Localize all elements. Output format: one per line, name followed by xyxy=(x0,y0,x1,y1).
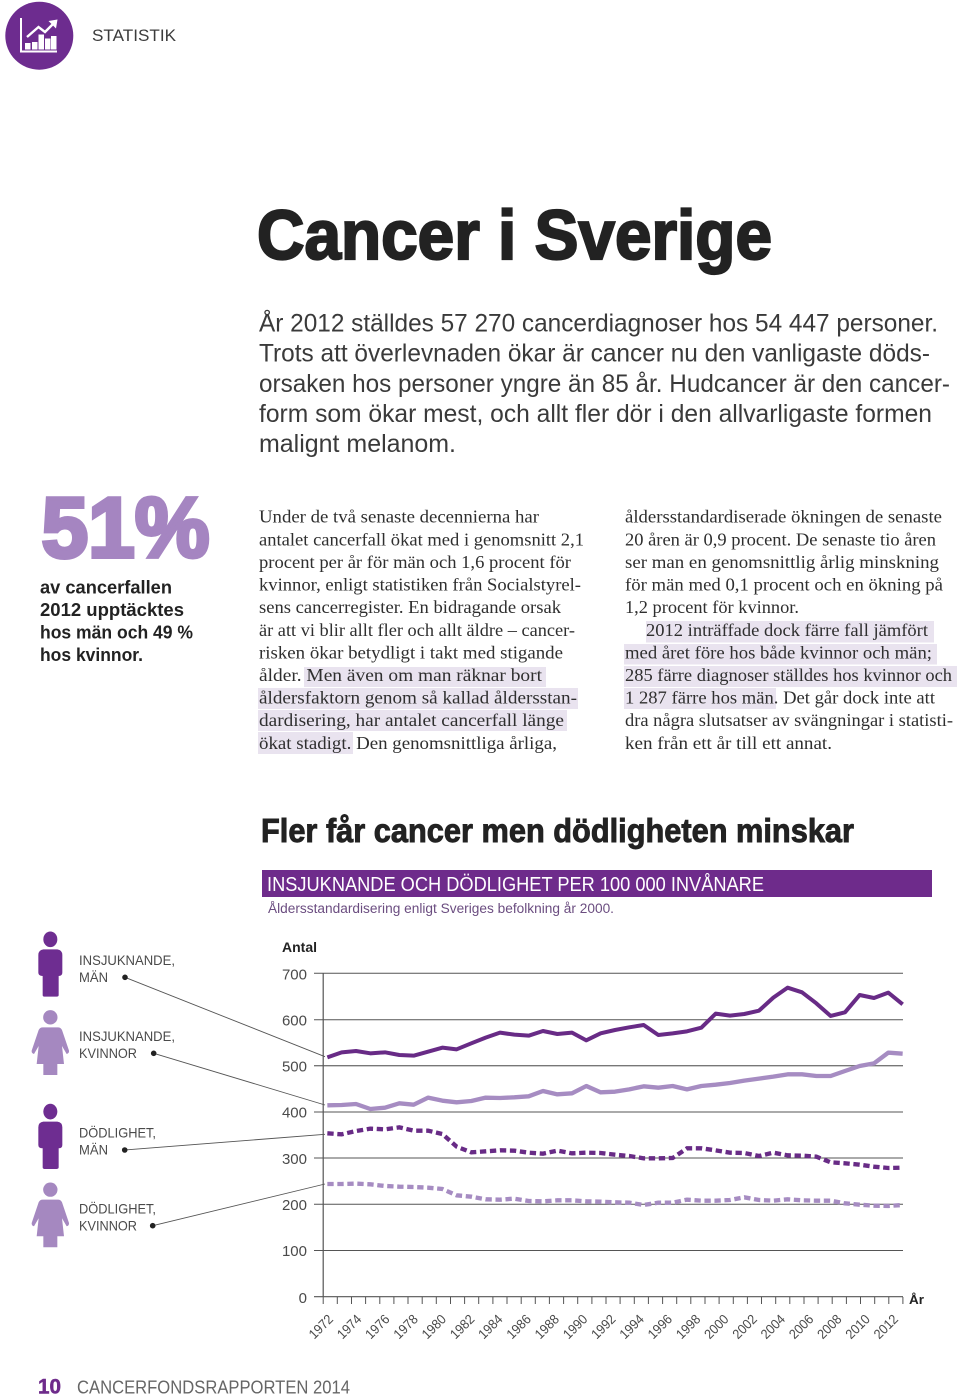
legend labels: INSJUKNANDE, xyxy=(79,952,175,968)
body text: right column: ken från ett år till ett annat. xyxy=(625,733,832,753)
body text: left column: procent per år för män och 1,6 procent för xyxy=(259,552,571,572)
x axis year labels: 1974 xyxy=(334,1311,365,1342)
legend labels: KVINNOR xyxy=(79,1218,137,1234)
body text: left column: ökat stadigt. Den genomsnittliga årliga, xyxy=(259,733,557,753)
line: mortality women xyxy=(327,1184,903,1206)
y axis labels: 100 xyxy=(282,1243,307,1260)
x axis year labels: 2008 xyxy=(814,1312,845,1342)
chart heading: Fler får cancer men dödligheten minskar xyxy=(261,812,854,849)
y axis labels: 200 xyxy=(282,1197,307,1214)
x axis year labels: 1994 xyxy=(617,1311,647,1342)
y axis labels: 700 xyxy=(282,966,307,983)
y axis labels: 400 xyxy=(282,1105,307,1122)
x axis year labels: 1998 xyxy=(673,1312,703,1342)
line: mortality men xyxy=(327,1127,903,1168)
callout: 51 percent xyxy=(40,481,210,665)
intro text: form som ökar mest, och allt fler dör i den allvarligaste formen xyxy=(259,400,932,428)
body text: right column: 1,2 procent för kvinnor. xyxy=(625,597,799,617)
legend xyxy=(32,931,175,1247)
x axis year labels: 1988 xyxy=(532,1312,562,1342)
icon: man, incidence xyxy=(38,931,62,997)
body text: right column: 2012 inträffade dock färre fall jämfört xyxy=(646,620,928,640)
x axis year labels: 1972 xyxy=(306,1312,336,1342)
title: Cancer i Sverige xyxy=(257,196,772,274)
x axis year labels: 1978 xyxy=(391,1312,421,1342)
line: incidence women xyxy=(327,1053,903,1109)
intro text xyxy=(259,308,950,458)
body text: left column: Under de två senaste decennierna har xyxy=(259,507,539,527)
chart title bar: INSJUKNANDE OCH DÖDLIGHET PER 100 000 INVÅNARE xyxy=(267,873,764,896)
body text: right column: 20 åren är 0,9 procent. De senaste tio åren xyxy=(625,529,936,549)
legend labels: DÖDLIGHET, xyxy=(79,1200,156,1216)
body text: left column: antalet cancerfall ökat med i genomsnitt 2,1 xyxy=(259,529,584,549)
body text: left column: åldersfaktorn genom så kallad åldersstan- xyxy=(259,688,577,708)
legend labels xyxy=(79,952,175,1234)
callout text: 2012 upptäcktes xyxy=(40,599,184,620)
callout text: hos män och 49 % xyxy=(40,622,193,642)
body text: right column: 285 färre diagnoser ställdes hos kvinnor och xyxy=(625,665,952,685)
body text: left column xyxy=(258,507,584,754)
x axis year labels: 1984 xyxy=(475,1311,506,1342)
y axis labels: 0 xyxy=(299,1290,307,1307)
y axis labels xyxy=(282,966,307,1307)
intro text: Trots att överlevnaden ökar är cancer nu den vanligaste döds- xyxy=(259,340,930,368)
callout text: hos kvinnor. xyxy=(40,644,143,665)
y axis labels: 300 xyxy=(282,1151,307,1168)
footer: publication name: CANCERFONDSRAPPORTEN 2014 xyxy=(77,1378,350,1398)
x axis year labels xyxy=(306,1311,901,1342)
legend labels: KVINNOR xyxy=(79,1045,137,1061)
y axis title: Antal xyxy=(282,939,317,955)
body text: right column: för män med 0,1 procent och en ökning på xyxy=(625,575,943,595)
body text: left column: risken ökar betydligt i takt med stigande xyxy=(259,642,563,662)
icon: woman, mortality xyxy=(32,1182,69,1247)
chart grid and axes xyxy=(314,973,903,1304)
body text: right column: 1 287 färre hos män. Det går dock inte att xyxy=(625,688,935,708)
section label: STATISTIK xyxy=(92,26,177,45)
x axis year labels: 1980 xyxy=(419,1312,449,1342)
x axis year labels: 1990 xyxy=(560,1312,590,1342)
x axis year labels: 2012 xyxy=(871,1312,901,1342)
x axis year labels: 2010 xyxy=(843,1312,873,1342)
legend labels: DÖDLIGHET, xyxy=(79,1124,156,1140)
line: incidence men xyxy=(327,988,903,1057)
x axis year labels: 2004 xyxy=(758,1311,788,1342)
body text: left column: är att vi blir allt fler och allt äldre – cancer- xyxy=(259,620,575,640)
body text: right column: ser man en genomsnittlig årlig minskning xyxy=(625,552,939,572)
icon: statistics chart badge xyxy=(5,2,73,70)
legend labels: INSJUKNANDE, xyxy=(79,1028,175,1044)
body text: left column: kvinnor, enligt statistiken från Socialstyrel- xyxy=(259,575,581,595)
chart subtitle: Åldersstandardisering enligt Sveriges befolkning år 2000. xyxy=(268,901,614,916)
y axis labels: 600 xyxy=(282,1012,307,1030)
x axis year labels: 2006 xyxy=(786,1312,816,1342)
body text: right column: med året före hos både kvinnor och män; xyxy=(625,642,932,662)
leader dots xyxy=(122,974,156,1228)
x axis year labels: 2000 xyxy=(701,1312,732,1342)
body text: left column: sens cancerregister. En bidragande orsak xyxy=(259,597,561,617)
x axis year labels: 1986 xyxy=(504,1312,534,1342)
y axis labels: 500 xyxy=(282,1059,307,1076)
body text: right column: dra några slutsatser av svängningar i statisti- xyxy=(625,710,953,730)
intro text: malignt melanom. xyxy=(259,430,456,458)
x axis year labels: 1982 xyxy=(447,1312,477,1342)
intro text: orsaken hos personer yngre än 85 år. Hudcancer är den cancer- xyxy=(259,370,950,398)
chart title bar xyxy=(262,870,932,897)
footer: page number: 10 xyxy=(38,1376,61,1398)
body text: right column xyxy=(624,507,957,753)
x axis year labels: 1996 xyxy=(645,1312,675,1342)
callout text: av cancerfallen xyxy=(40,576,172,598)
x axis year labels: 2002 xyxy=(730,1312,760,1342)
x axis title: År xyxy=(909,1292,924,1307)
legend labels: MÄN xyxy=(79,969,108,985)
body text: right column: åldersstandardiserade ökningen de senaste xyxy=(625,507,942,527)
line chart xyxy=(122,939,924,1342)
intro text: År 2012 ställdes 57 270 cancerdiagnoser hos 54 447 personer. xyxy=(259,308,938,338)
x axis year labels: 1992 xyxy=(588,1312,619,1342)
legend labels: MÄN xyxy=(79,1142,108,1158)
x axis year labels: 1976 xyxy=(362,1312,393,1342)
callout number: 51% xyxy=(42,481,210,576)
icon: man, mortality xyxy=(38,1104,62,1169)
callout text xyxy=(40,576,193,665)
icon: woman, incidence xyxy=(32,1010,69,1075)
body text: left column: dardisering, har antalet cancerfall länge xyxy=(259,710,564,730)
leader lines xyxy=(125,977,325,1226)
body text: left column: ålder. Men även om man räknar bort xyxy=(259,665,542,685)
